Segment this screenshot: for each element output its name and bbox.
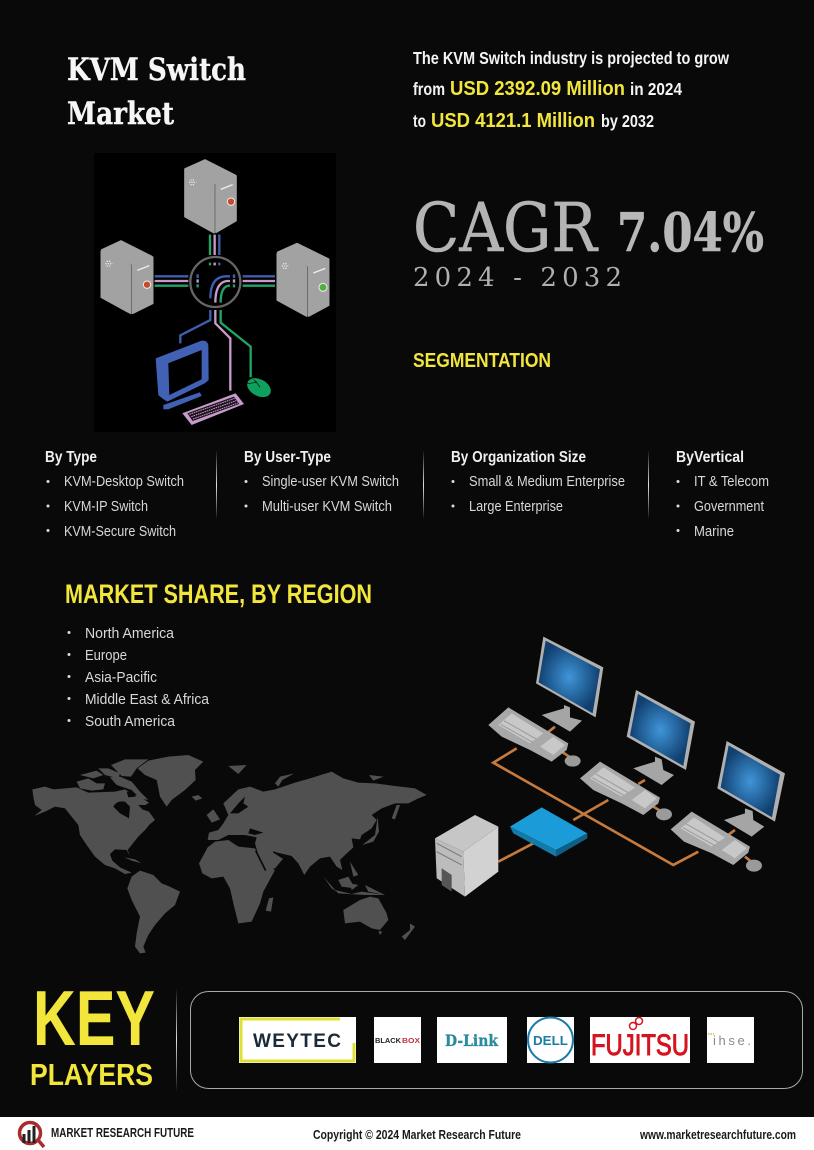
server: right — [277, 244, 329, 316]
market size statement: USD 2392.09 Million — [450, 77, 625, 100]
segment: by organization size: Large Enterprise — [469, 499, 563, 515]
region list: Europe — [85, 648, 127, 664]
heading: key players: KEY — [33, 974, 155, 1062]
segment: by user-type: Single-user KVM Switch — [262, 474, 399, 490]
logo: Black Box: BOX — [402, 1036, 420, 1045]
cables — [155, 235, 275, 391]
logo: D-Link: D-Link — [445, 1031, 499, 1050]
footer: MARKET RESEARCH FUTURE — [51, 1126, 194, 1140]
title: KVM Switch — [67, 52, 246, 88]
logo: Dell: DELL — [533, 1033, 568, 1048]
logo: D-Link — [437, 1017, 507, 1063]
segment: by organization size: By Organization Size — [451, 449, 586, 466]
segment: by type: KVM-IP Switch — [64, 499, 148, 515]
illustration: KVM switch diagram — [94, 153, 336, 432]
market size statement — [413, 48, 729, 132]
segment: by organization size: Small & Medium Enterprise — [469, 474, 625, 490]
illustration: networked workstations — [435, 637, 785, 897]
logo: Black Box: BLACK — [375, 1036, 402, 1045]
cables — [493, 727, 753, 865]
segment: by user-type — [244, 449, 399, 515]
switch hub ring — [190, 257, 240, 307]
logo: IHSE — [707, 1017, 754, 1063]
segment: by type: By Type — [45, 449, 97, 466]
segment: by user-type: Multi-user KVM Switch — [262, 499, 392, 515]
mouse — [244, 374, 274, 401]
keyboard — [182, 393, 244, 425]
market size statement: The KVM Switch industry is projected to grow — [413, 48, 729, 68]
world map — [32, 755, 427, 953]
region list: South America — [85, 714, 176, 730]
CAGR figure — [413, 189, 764, 293]
logo: IHSE: ihse. — [713, 1033, 751, 1048]
CAGR figure: CAGR — [413, 189, 599, 267]
logo: Black Box — [374, 1017, 421, 1063]
market size statement: to — [413, 111, 426, 131]
CAGR figure: 7.04% — [617, 202, 764, 264]
segment: by organization size — [451, 449, 625, 515]
icon: market research future logo — [20, 1122, 44, 1147]
logo: Dell — [527, 1017, 574, 1063]
heading: key players: PLAYERS — [30, 1057, 153, 1092]
segment: by type — [45, 449, 184, 540]
logo: Weytec — [239, 1017, 356, 1063]
market size statement: by 2032 — [601, 111, 654, 131]
segment: by vertical: IT & Telecom — [694, 474, 769, 490]
heading: market share by region: MARKET SHARE, BY REGION — [65, 579, 372, 609]
region list: North America — [85, 626, 175, 642]
map: americas and greenland — [32, 755, 203, 953]
segment: by user-type: By User-Type — [244, 449, 331, 466]
footer: Copyright © 2024 Market Research Future — [313, 1128, 521, 1142]
market size statement: in 2024 — [630, 79, 682, 99]
server: top — [185, 160, 236, 233]
market size statement: USD 4121.1 Million — [431, 109, 595, 132]
map: eurasia, africa, oceania — [199, 765, 427, 940]
switch box — [510, 807, 587, 857]
heading: key players — [30, 974, 155, 1092]
map: red sea and gulf channels — [256, 851, 283, 871]
workstation 3 — [671, 741, 785, 872]
computer tower — [435, 815, 498, 897]
region list: Asia-Pacific — [85, 670, 157, 686]
CAGR figure: 2024 - 2032 — [413, 263, 622, 293]
market size statement: from — [413, 79, 445, 99]
footer — [0, 1117, 814, 1150]
segment: by vertical — [676, 449, 769, 540]
segment: by vertical: ByVertical — [676, 449, 744, 466]
logo: Weytec: WEYTEC — [253, 1031, 341, 1052]
segment: by vertical: Government — [694, 499, 764, 515]
segment: by vertical: Marine — [694, 524, 734, 540]
region list — [68, 626, 210, 730]
region list: Middle East & Africa — [85, 692, 210, 708]
segment: by type: KVM-Desktop Switch — [64, 474, 184, 490]
server: left — [101, 241, 153, 313]
title: Market — [67, 96, 175, 132]
logo: Fujitsu — [590, 1017, 690, 1063]
heading: segmentation: SEGMENTATION — [413, 349, 551, 372]
workstation 2 — [580, 690, 695, 820]
logo: Fujitsu: FUJITSU — [591, 1029, 689, 1062]
workstation 1 — [488, 637, 603, 767]
monitor — [156, 341, 209, 409]
segment: by type: KVM-Secure Switch — [64, 524, 176, 540]
title — [67, 52, 246, 132]
panel: company logos — [190, 992, 802, 1088]
